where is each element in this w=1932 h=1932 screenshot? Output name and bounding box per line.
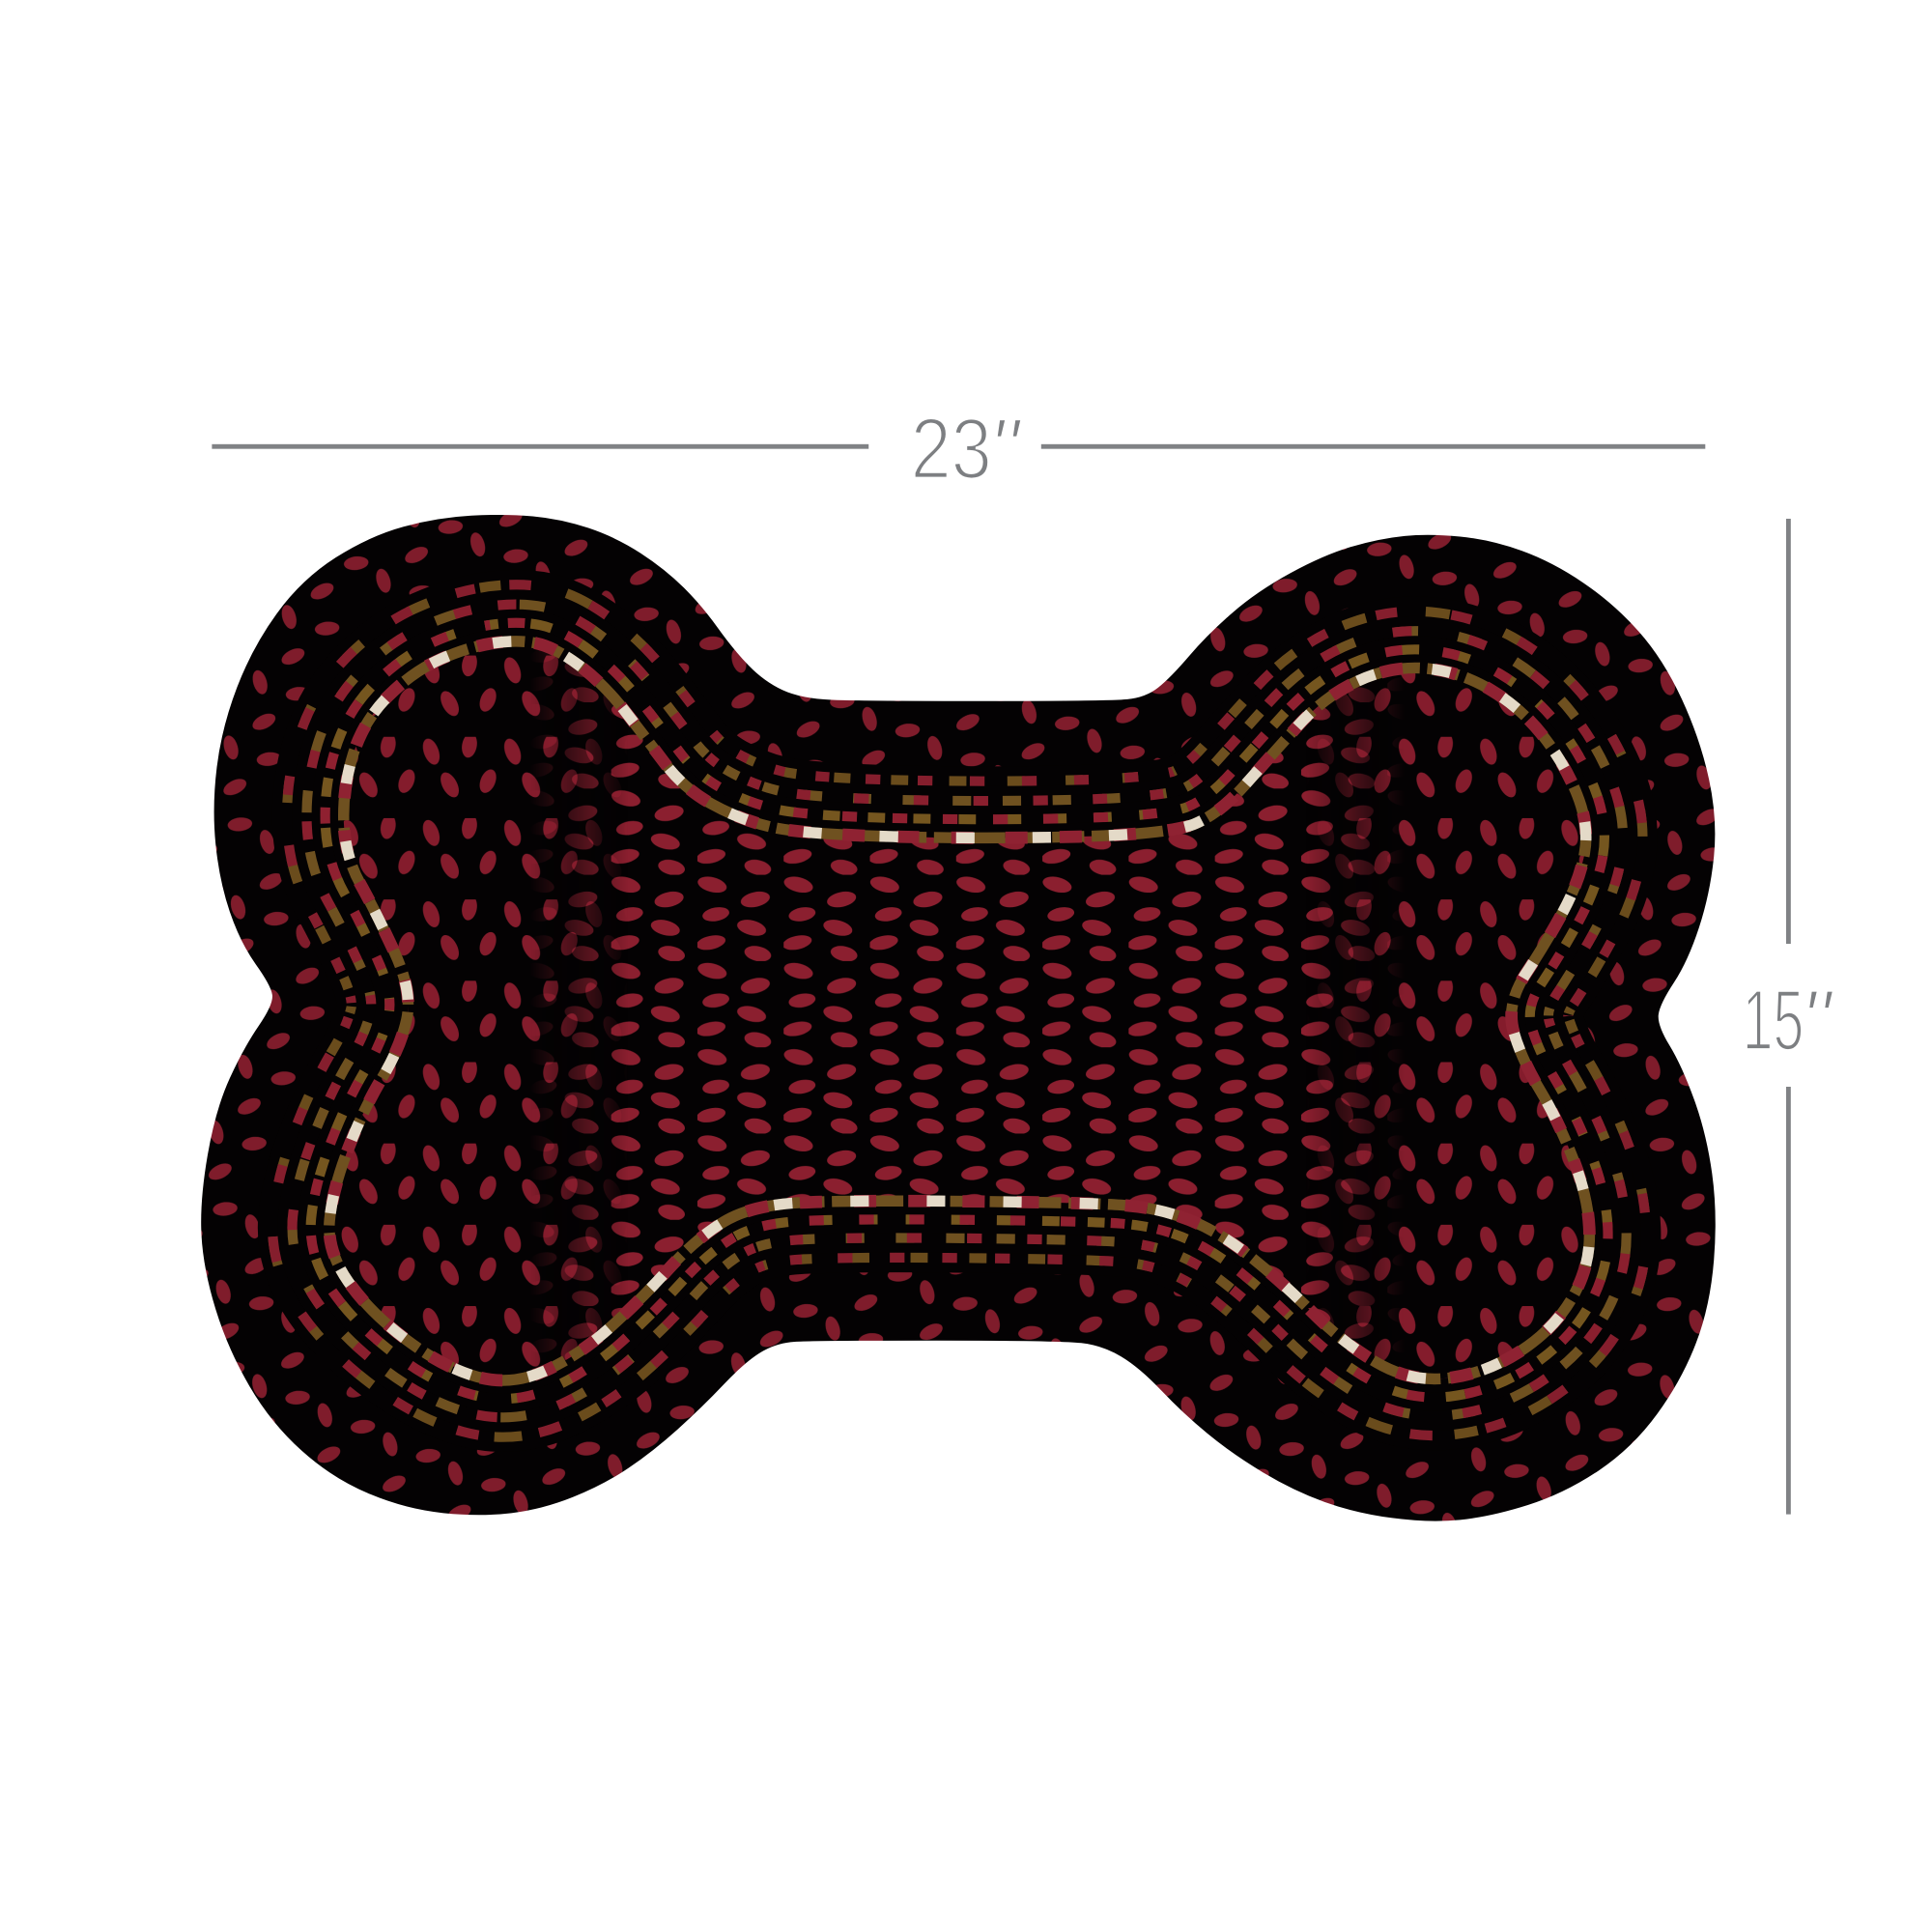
centre field of red stitches [329,641,1589,1380]
height label: " [1801,972,1834,1068]
width dimension line, left [212,444,868,449]
infographic: rug with dimensions [201,419,1833,1521]
height dimension line, bottom [1786,1087,1791,1515]
width label: 23 [911,400,992,497]
width label: " [988,400,1022,497]
bone-shaped braided rug [201,515,1716,1521]
lobe fields of red stitches [335,650,1584,1379]
height label: 15 [1743,972,1804,1068]
width dimension line, right [1041,444,1705,449]
cream braid line [329,641,1589,1380]
concentric braid rows between rug edge and cream braid [329,641,1589,1380]
height dimension line, top [1786,519,1791,944]
